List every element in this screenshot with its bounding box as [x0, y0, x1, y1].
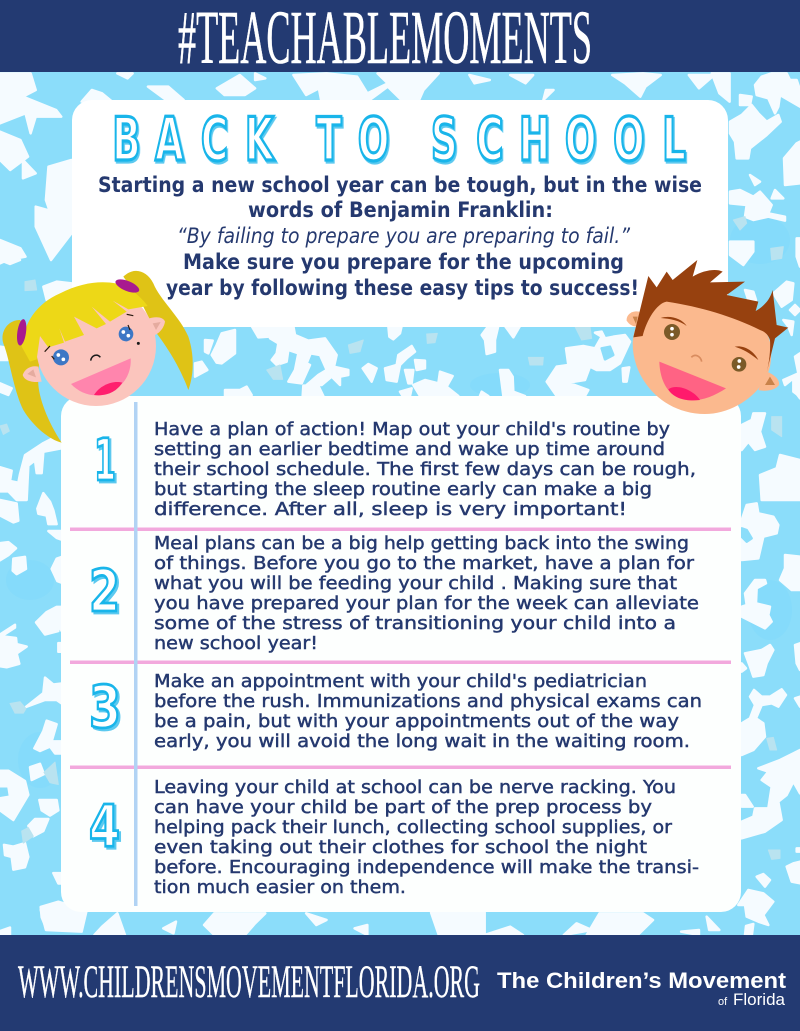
tip 4 text: helping pack their lunch, collecting school supplies, or: [154, 818, 673, 838]
number 3: 3: [89, 673, 121, 741]
tip 1 text: their school schedule. The first few days can be rough,: [154, 460, 696, 480]
intro text: Starting a new school year can be tough, but in the wise: [98, 173, 702, 197]
logo: The Children's Movement of Florida: of: [718, 996, 728, 1008]
intro text: year by following these easy tips to success!: [166, 276, 639, 300]
tip 2: [89, 534, 699, 654]
illustration: boy with spiky brown hair: [627, 260, 788, 414]
tip 3 text: Make an appointment with your child's pediatrician: [154, 672, 647, 692]
tip 2 text: what you will be feeding your child . Making sure that: [154, 574, 677, 594]
heading: back to school: TO: [316, 105, 389, 174]
tip 4 text: can have your child be part of the prep process by: [154, 798, 652, 818]
logo: The Children's Movement of Florida: The Children’s Movement: [497, 968, 787, 993]
intro text: [98, 173, 702, 300]
logo: The Children's Movement of Florida: [497, 968, 787, 1009]
tip 3 text: before the rush. Immunizations and physical exams can: [154, 692, 702, 712]
tip 1 text: [154, 420, 696, 520]
intro text: Make sure you prepare for the upcoming: [183, 250, 624, 274]
tip 3 text: be a pain, but with your appointments out of the way: [154, 712, 679, 732]
tip 2 text: Meal plans can be a big help getting back into the swing: [154, 534, 689, 554]
tip 1: [94, 420, 696, 520]
header band: [0, 0, 800, 80]
tip 2 text: new school year!: [154, 634, 318, 654]
tip 4 text: [154, 778, 699, 898]
tip 4 text: tion much easier on them.: [154, 878, 406, 898]
heading: back to school: SCHOOL: [431, 105, 686, 174]
tip 4 text: even taking out their clothes for school the night: [154, 838, 647, 858]
tip 3 text: early, you will avoid the long wait in the waiting room.: [154, 732, 690, 752]
heading: back to school: BACK: [112, 105, 275, 174]
tip 3 text: [154, 672, 702, 752]
panel: tips: [61, 396, 741, 912]
panel: introduction: [72, 100, 728, 327]
intro text: words of Benjamin Franklin:: [248, 198, 553, 222]
tip 1 text: Have a plan of action! Map out your child's routine by: [154, 420, 670, 440]
tip 4 text: Leaving your child at school can be nerve racking. You: [154, 778, 676, 798]
logo: The Children's Movement of Florida: Florida: [733, 990, 786, 1009]
illustration: girl with blonde pigtails: [2, 271, 193, 443]
tip 1 text: setting an earlier bedtime and wake up time around: [154, 440, 665, 460]
tip 4 text: before. Encouraging independence will make the transi-: [154, 858, 699, 878]
number 4: 4: [89, 792, 120, 860]
tip 2 text: [154, 534, 699, 654]
tip 1 text: but starting the sleep routine early can make a big: [154, 480, 652, 500]
number 2: 2: [89, 557, 120, 625]
tip 4: [89, 778, 699, 898]
tip 2 text: you have prepared your plan for the week can alleviate: [154, 594, 699, 614]
tip 2 text: of things. Before you go to the market, have a plan for: [154, 554, 695, 574]
tip 1 text: difference. After all, sleep is very important!: [154, 500, 627, 520]
tip 2 text: some of the stress of transitioning your child into a: [154, 614, 676, 634]
tip 3: [89, 672, 702, 752]
number 1: 1: [94, 426, 116, 494]
intro text: “By failing to prepare you are preparing to fail.”: [177, 224, 631, 248]
footer band: [0, 935, 800, 1031]
